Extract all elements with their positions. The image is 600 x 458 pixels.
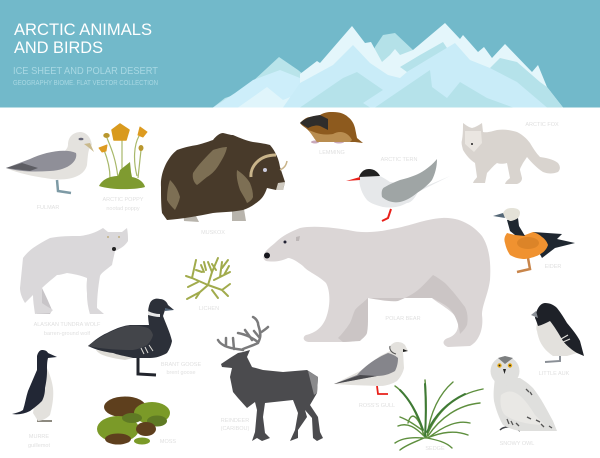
arctic fox bbox=[462, 122, 560, 184]
ross's gull: ROSS'S GULL bbox=[359, 403, 395, 409]
brant goose: BRANT GOOSE bbox=[161, 362, 201, 368]
arctic poppy bbox=[99, 124, 147, 212]
reindeer: REINDEER bbox=[221, 418, 249, 424]
lemming bbox=[300, 112, 363, 156]
icon: mountains bbox=[213, 23, 563, 108]
sedge: SEDGE bbox=[425, 446, 445, 452]
brant goose: brent goose bbox=[166, 370, 196, 376]
snowy owl: SNOWY OWL bbox=[500, 441, 534, 447]
murre: MURRE bbox=[29, 434, 49, 440]
muskox: MUSKOX bbox=[201, 230, 225, 236]
arctic tern: ARCTIC TERN bbox=[381, 157, 417, 163]
subtitle: ICE SHEET AND POLAR DESERT bbox=[13, 65, 159, 77]
muskox bbox=[161, 133, 287, 236]
murre bbox=[12, 350, 57, 449]
wolf: barren-ground wolf bbox=[44, 331, 91, 337]
reindeer: (CARIBOU) bbox=[221, 426, 250, 432]
snowy owl bbox=[490, 356, 557, 447]
lemming: LEMMING bbox=[319, 150, 345, 156]
lichen: LICHEN bbox=[199, 306, 219, 312]
eider bbox=[493, 208, 575, 272]
lichen bbox=[186, 258, 230, 312]
title line 2: AND BIRDS bbox=[14, 39, 103, 57]
wolf: ALASKAN TUNDRA WOLF bbox=[34, 322, 101, 328]
brant goose bbox=[88, 299, 201, 376]
eider: EIDER bbox=[545, 264, 561, 270]
fulmar: FULMAR bbox=[37, 205, 59, 211]
fulmar bbox=[6, 132, 94, 211]
arctic fox: ARCTIC FOX bbox=[525, 122, 559, 128]
polar bear: POLAR BEAR bbox=[385, 316, 421, 322]
polar bear bbox=[263, 218, 490, 347]
little auk: LITTLE AUK bbox=[539, 371, 570, 377]
murre: guillemot bbox=[28, 443, 50, 449]
arctic poppy: ARCTIC POPPY bbox=[103, 197, 144, 203]
little auk bbox=[531, 303, 584, 377]
wolf bbox=[20, 228, 128, 337]
arctic tern bbox=[346, 157, 450, 221]
header panel bbox=[0, 0, 600, 108]
ross's gull bbox=[334, 342, 408, 409]
reindeer bbox=[218, 317, 323, 441]
moss: MOSS bbox=[160, 439, 176, 445]
caption: GEOGRAPHY BIOME. FLAT VECTOR COLLECTION bbox=[13, 80, 158, 87]
sedge bbox=[395, 380, 483, 452]
moss bbox=[97, 396, 176, 445]
title: ARCTIC ANIMALS bbox=[14, 21, 152, 39]
arctic poppy: nootad poppy bbox=[106, 206, 140, 212]
